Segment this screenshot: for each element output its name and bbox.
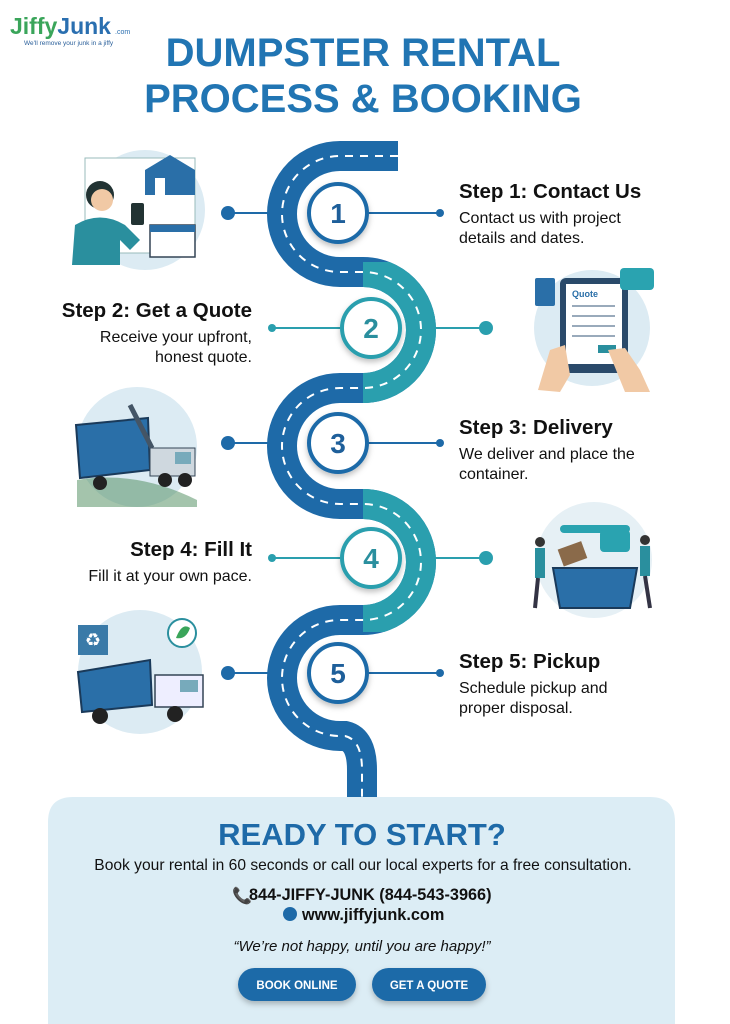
title	[144, 31, 582, 121]
logo: We'll remove your junk in a jiffy	[24, 40, 114, 47]
step texts: Contact us with project	[459, 210, 621, 227]
step texts: Fill it at your own pace.	[88, 568, 252, 585]
step texts: Step 4: Fill It	[130, 538, 252, 561]
number badges: 2	[363, 313, 379, 344]
CTA text: Book your rental in 60 seconds or call our local experts for a free consultation.	[94, 857, 632, 874]
step texts: Step 5: Pickup	[459, 650, 600, 673]
number badges: 1	[330, 198, 346, 229]
step texts: Step 3: Delivery	[459, 416, 613, 439]
phone line: 844-JIFFY-JUNK (844-543-3966)	[249, 886, 492, 904]
illustration 4: filling dumpster	[535, 502, 652, 618]
number badges: 5	[330, 658, 346, 689]
illustration 3: dumpster delivery truck	[76, 387, 197, 507]
number badges	[309, 184, 400, 702]
number badges: 3	[330, 428, 346, 459]
title: DUMPSTER RENTAL	[166, 31, 560, 75]
illustration 5: pickup truck recycling	[78, 610, 203, 734]
illustration 5: pickup truck recycling: ♻	[85, 630, 101, 650]
title: PROCESS & BOOKING	[144, 77, 582, 121]
illustration 2: tablet quote	[534, 268, 654, 392]
step texts: honest quote.	[155, 349, 252, 366]
step texts: container.	[459, 466, 528, 483]
phone line: 📞	[232, 885, 252, 905]
CTA panel: GET A QUOTE	[390, 980, 469, 992]
step texts: Step 1: Contact Us	[459, 180, 641, 203]
step texts	[62, 180, 641, 717]
number badges: 4	[363, 543, 379, 574]
CTA panel	[48, 797, 675, 1024]
connectors	[221, 206, 493, 680]
buttons	[238, 968, 486, 1001]
step texts: Schedule pickup and	[459, 680, 608, 697]
illustration 2: tablet quote: Quote	[572, 289, 598, 299]
step texts: Receive your upfront,	[100, 329, 252, 346]
step texts: details and dates.	[459, 230, 584, 247]
illustration 1: person with phone	[72, 150, 205, 270]
logo	[10, 13, 130, 47]
step texts: We deliver and place the	[459, 446, 635, 463]
road	[282, 156, 421, 800]
tagline: “We’re not happy, until you are happy!”	[233, 938, 492, 955]
step texts: Step 2: Get a Quote	[62, 299, 252, 322]
logo: JiffyJunk	[10, 13, 111, 39]
step texts: proper disposal.	[459, 700, 573, 717]
CTA panel: BOOK ONLINE	[256, 980, 338, 992]
website line: www.jiffyjunk.com	[301, 906, 444, 924]
logo: .com	[115, 29, 130, 36]
CTA heading: READY TO START?	[218, 817, 506, 852]
